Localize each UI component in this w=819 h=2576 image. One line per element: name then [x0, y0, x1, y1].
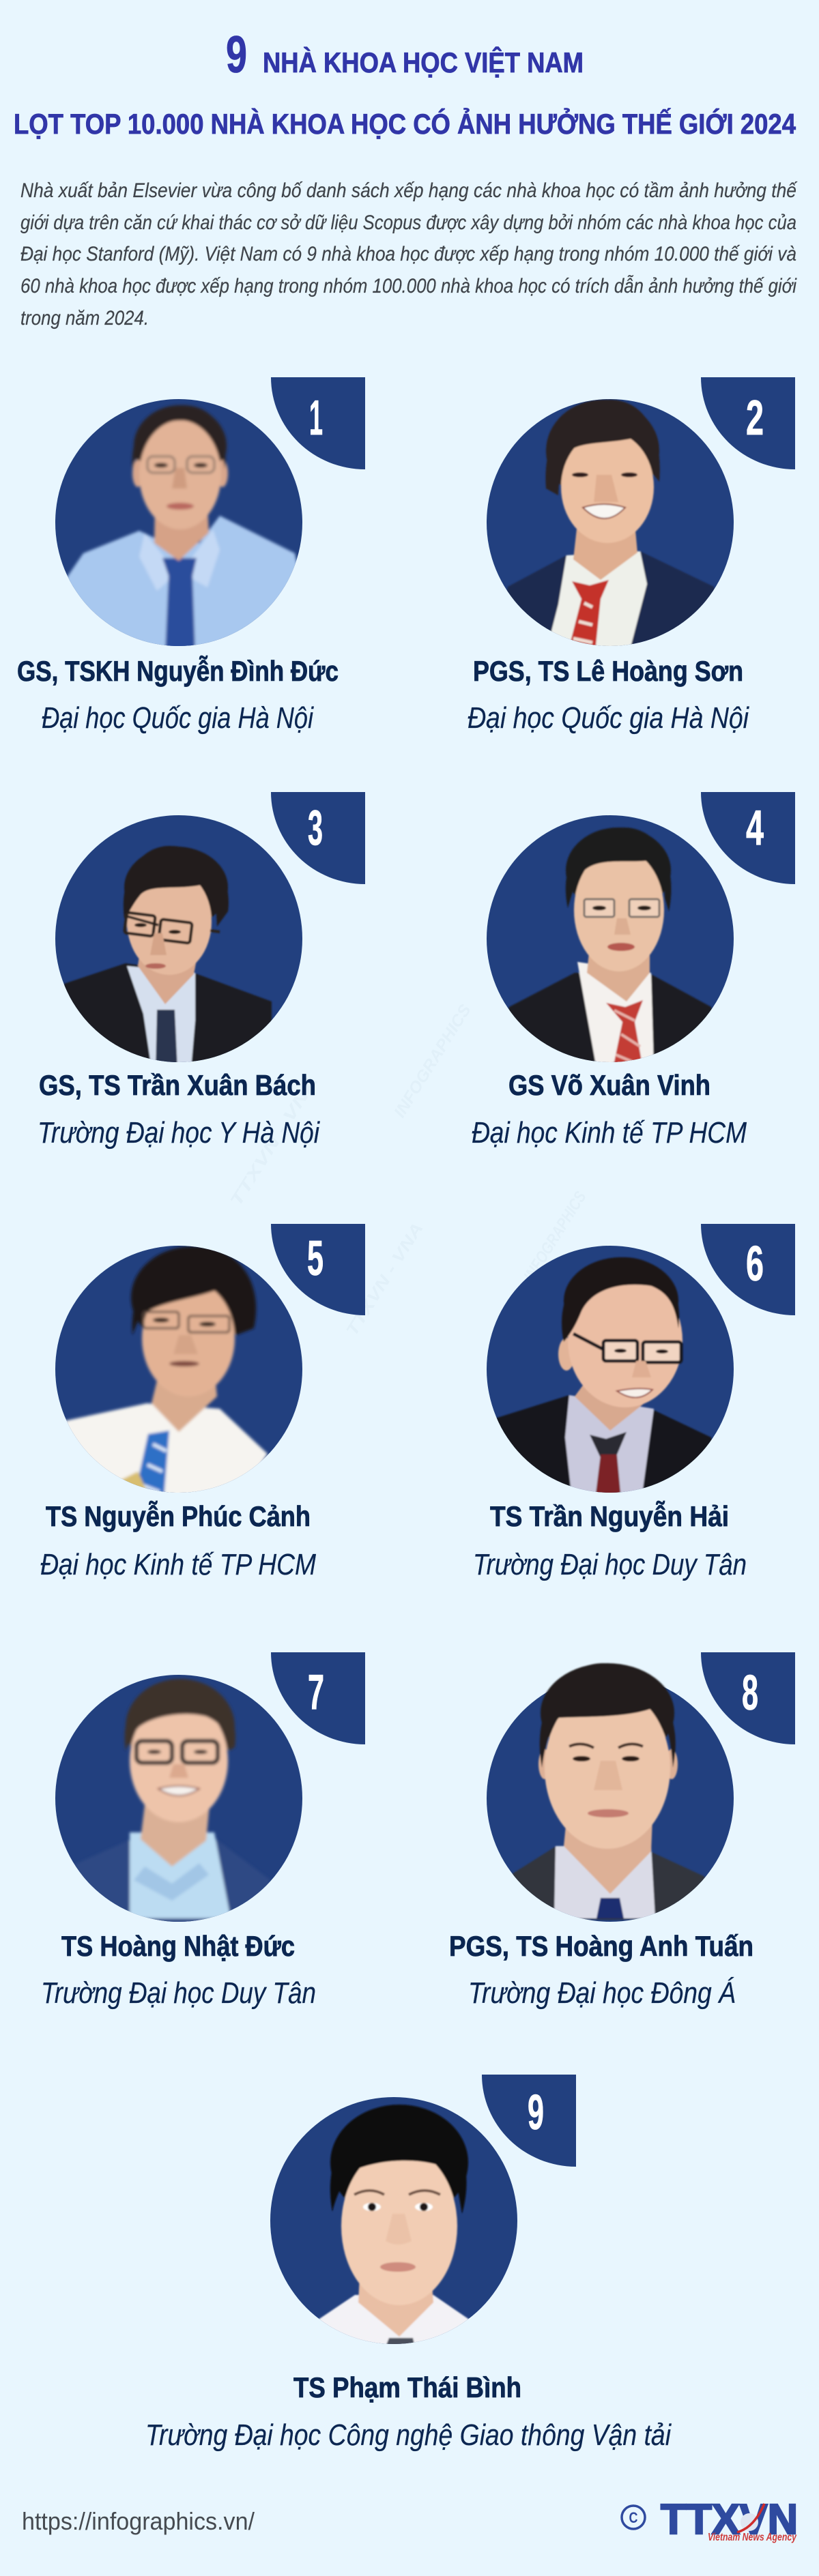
panel: scientist 4 — [472, 792, 795, 1150]
name 4: GS Võ Xuân Vinh — [508, 1069, 710, 1101]
name 3: GS, TS Trần Xuân Bách — [39, 1069, 316, 1101]
portrait 4 — [487, 815, 734, 1068]
panel: scientist 8 — [449, 1652, 795, 2010]
text: INFOGRAPHICS — [390, 1001, 475, 1121]
rank badge 6 — [701, 1224, 795, 1315]
name 2: PGS, TS Lê Hoàng Sơn — [473, 655, 743, 687]
rank badge 7 — [271, 1652, 365, 1744]
affiliation 9: Trường Đại học Công nghệ Giao thông Vận tải — [145, 2418, 672, 2452]
affiliation 1: Đại học Quốc gia Hà Nội — [42, 701, 314, 735]
portrait 5 — [55, 1246, 302, 1499]
rank badge 2: 2 — [746, 391, 764, 445]
intro paragraph — [20, 179, 798, 330]
panel: scientist 6 — [473, 1224, 795, 1581]
intro paragraph: trong năm 2024. — [20, 307, 149, 330]
affiliation 2: Đại học Quốc gia Hà Nội — [468, 701, 749, 735]
affiliation 8: Trường Đại học Đông Á — [468, 1976, 736, 2010]
rank badge 1 — [271, 377, 365, 469]
footer url: https://infographics.vn/ — [22, 2507, 255, 2535]
rank badge 9 — [482, 2075, 576, 2167]
portrait 6 — [487, 1246, 734, 1499]
rank badge 4 — [701, 792, 795, 884]
rank badge 6: 6 — [746, 1237, 764, 1291]
portrait 3 — [55, 815, 302, 1068]
panel: scientist 2 — [468, 377, 795, 735]
name 7: TS Hoàng Nhật Đức — [61, 1930, 295, 1962]
rank badge 5 — [271, 1224, 365, 1315]
name 8: PGS, TS Hoàng Anh Tuấn — [449, 1930, 753, 1962]
panel: scientist 7 — [41, 1652, 365, 2010]
portrait 1 — [55, 399, 303, 652]
rank badge 5: 5 — [307, 1231, 324, 1286]
name 6: TS Trần Nguyễn Hải — [490, 1499, 729, 1532]
text: INFOGRAPHICS — [520, 1188, 590, 1285]
rank badge 2 — [701, 377, 795, 469]
rank badge 3: 3 — [308, 801, 323, 855]
affiliation 7: Trường Đại học Duy Tân — [41, 1976, 316, 2010]
rank badge 8 — [701, 1652, 795, 1744]
name 5: TS Nguyễn Phúc Cảnh — [46, 1499, 311, 1532]
logo: TTXVN Vietnam News Agency: C — [629, 2509, 638, 2526]
portrait 9 — [270, 2097, 517, 2350]
affiliation 6: Trường Đại học Duy Tân — [473, 1548, 747, 1581]
rank badge 9: 9 — [528, 2085, 544, 2140]
panel: scientist 3 — [38, 792, 365, 1150]
rank badge 7: 7 — [308, 1665, 324, 1720]
affiliation 4: Đại học Kinh tế TP HCM — [472, 1116, 747, 1150]
title: NHÀ KHOA HỌC VIỆT NAM — [263, 46, 584, 78]
panel: scientist 1 — [17, 377, 365, 735]
panel: scientist 5 — [40, 1224, 365, 1581]
rank badge 3 — [271, 792, 365, 884]
affiliation 3: Trường Đại học Y Hà Nội — [38, 1116, 320, 1150]
portrait 2 — [487, 399, 734, 652]
rank badge 1: 1 — [309, 391, 323, 445]
title — [14, 26, 796, 140]
logo: TTXVN Vietnam News Agency: TTXVN — [661, 2496, 798, 2543]
rank badge 4: 4 — [746, 801, 764, 855]
panel: scientist 9 — [145, 2075, 672, 2452]
text: TTXVN - VNA — [227, 1072, 322, 1210]
portrait 8 — [487, 1663, 734, 1922]
name 1: GS, TSKH Nguyễn Đình Đức — [17, 654, 339, 687]
portrait 7 — [55, 1675, 302, 1928]
text: TTXVN - VNA — [343, 1220, 427, 1339]
affiliation 5: Đại học Kinh tế TP HCM — [40, 1548, 316, 1581]
rank badge 8: 8 — [742, 1666, 758, 1721]
name 9: TS Phạm Thái Bình — [293, 2371, 521, 2403]
title: 9 — [226, 26, 247, 84]
